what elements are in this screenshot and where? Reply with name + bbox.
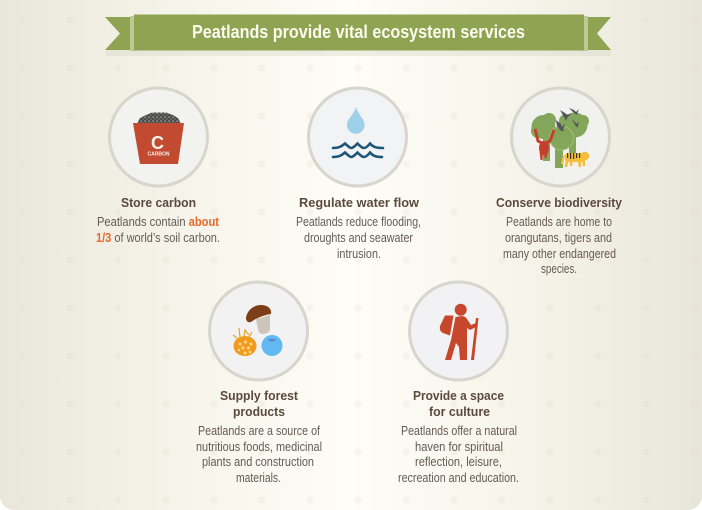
text block: Peatlands contain about (97, 214, 220, 229)
heading: Store carbon (121, 195, 196, 210)
text block: materials. (236, 470, 281, 485)
text block: Peatlands are a source of (198, 423, 320, 438)
heading: Provide a space (413, 388, 504, 403)
text block: plants and construction (202, 454, 314, 469)
icon: forest and wildlife (512, 88, 610, 186)
heading: for culture (429, 404, 490, 419)
text block: Peatlands reduce flooding, (296, 214, 421, 229)
text block: nutritious foods, medicinal (196, 439, 322, 454)
panel: store carbon (96, 88, 220, 245)
text block: many other endangered (503, 246, 616, 261)
text block: species. (541, 261, 577, 276)
icon: water drop and waves (308, 88, 406, 186)
text block: intrusion. (337, 246, 381, 261)
heading (220, 388, 299, 419)
text block (196, 423, 322, 485)
text block (296, 214, 421, 261)
title: Peatlands provide vital ecosystem services (192, 22, 525, 42)
icon: hiker (410, 282, 508, 380)
banner (105, 14, 611, 56)
text block: reflection, leisure, (415, 454, 502, 469)
heading (413, 388, 504, 419)
icon: carbon bucket: C (151, 133, 164, 153)
text block: 1/3 of world’s soil carbon. (96, 230, 220, 245)
text block: Peatlands offer a natural (401, 423, 517, 438)
heading: Conserve biodiversity (496, 195, 623, 210)
text block (96, 214, 220, 245)
panel: regulate water flow (296, 88, 421, 261)
icon: carbon bucket (110, 88, 208, 186)
panel: provide a space for culture (398, 282, 519, 485)
heading: Regulate water flow (299, 195, 420, 210)
heading: Supply forest (220, 388, 299, 403)
panel: supply forest products (196, 282, 322, 485)
panel: conserve biodiversity (496, 88, 623, 276)
icon: carbon bucket: CARBON (148, 152, 170, 158)
text block (503, 214, 616, 276)
text block: orangutans, tigers and (505, 230, 612, 245)
text block: droughts and seawater (304, 230, 414, 245)
icon: mushroom and berries (210, 282, 308, 380)
heading: products (233, 404, 285, 419)
text block: Peatlands are home to (506, 214, 612, 229)
text block: recreation and education. (398, 470, 519, 485)
text block (398, 423, 519, 485)
text block: haven for spiritual (415, 439, 503, 454)
